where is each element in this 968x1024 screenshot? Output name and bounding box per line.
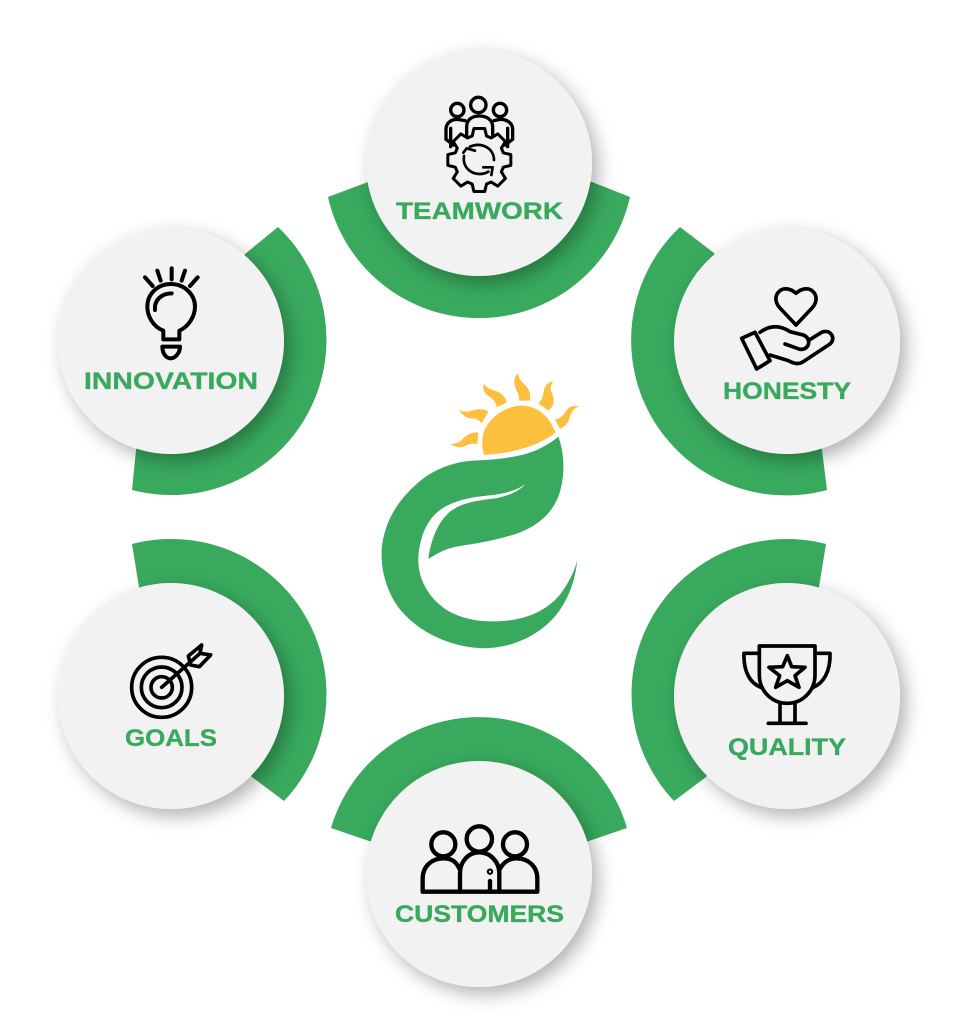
icon: light bulb	[145, 268, 198, 358]
arc: innovation	[132, 227, 326, 495]
arc: teamwork	[328, 163, 630, 318]
logo sun rays	[451, 373, 579, 447]
arc: quality	[632, 539, 826, 801]
logo: sun and leaf	[382, 373, 579, 648]
icon: teamwork gear and people	[446, 97, 513, 191]
panel: quality	[674, 583, 900, 809]
label: customers: CUSTOMERS	[395, 901, 564, 928]
arc: honesty	[631, 227, 827, 495]
label: teamwork: TEAMWORK	[396, 198, 564, 225]
logo leaf	[382, 437, 577, 648]
icon: target with arrow	[132, 645, 211, 717]
icon: heart in hand	[742, 289, 833, 369]
panel: teamwork	[366, 50, 592, 276]
arc: goals	[132, 539, 326, 801]
panel: honesty	[674, 228, 900, 454]
panel: customers	[366, 761, 592, 987]
arc: customers	[331, 717, 627, 874]
panel: innovation	[58, 228, 284, 454]
label: innovation: INNOVATION	[84, 368, 258, 395]
label: honesty: HONESTY	[723, 378, 851, 405]
logo sun disc	[482, 406, 556, 455]
label: quality: QUALITY	[728, 734, 846, 761]
label: goals: GOALS	[125, 725, 217, 752]
icon: customers	[423, 826, 537, 892]
icon: trophy	[744, 646, 830, 723]
panel: goals	[58, 583, 284, 809]
